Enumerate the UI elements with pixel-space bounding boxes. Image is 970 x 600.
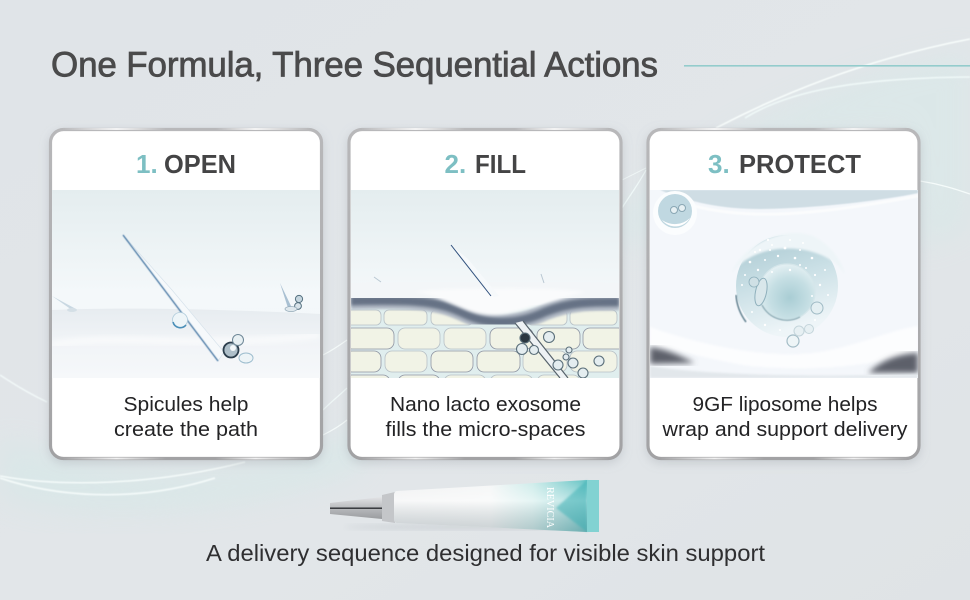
caption: 9GF liposome helps [692, 393, 878, 416]
icon: product tube [330, 480, 599, 532]
heading: 1. OPEN: 1. [136, 149, 158, 179]
title accent line [684, 65, 970, 67]
title: One Formula, Three Sequential Actions [51, 46, 658, 84]
caption: create the path [114, 418, 258, 441]
illustration: skin cells and exosome [351, 190, 619, 378]
caption [114, 393, 258, 441]
heading: 3. PROTECT: PROTECT [739, 149, 861, 179]
heading: 2. FILL: FILL [475, 149, 526, 179]
icon: product tube: REVICIA [544, 487, 556, 528]
panel: 1 open [50, 128, 322, 460]
heading: 2. FILL: 2. [444, 149, 466, 179]
panel: 2 fill [345, 128, 625, 460]
caption: fills the micro-spaces [386, 418, 586, 441]
footer tagline: A delivery sequence designed for visible skin support [206, 540, 765, 566]
caption [661, 393, 908, 441]
caption: Spicules help [124, 393, 248, 416]
illustration: liposome bubble [650, 190, 918, 378]
heading: 2. FILL [444, 149, 526, 179]
caption: Nano lacto exosome [390, 393, 581, 416]
panel: 3 protect [648, 128, 919, 460]
heading: 3. PROTECT: 3. [708, 149, 730, 179]
caption: wrap and support delivery [661, 418, 908, 441]
caption [386, 393, 586, 441]
illustration: spicule on skin surface [52, 190, 320, 378]
heading: 1. OPEN: OPEN [164, 149, 236, 179]
